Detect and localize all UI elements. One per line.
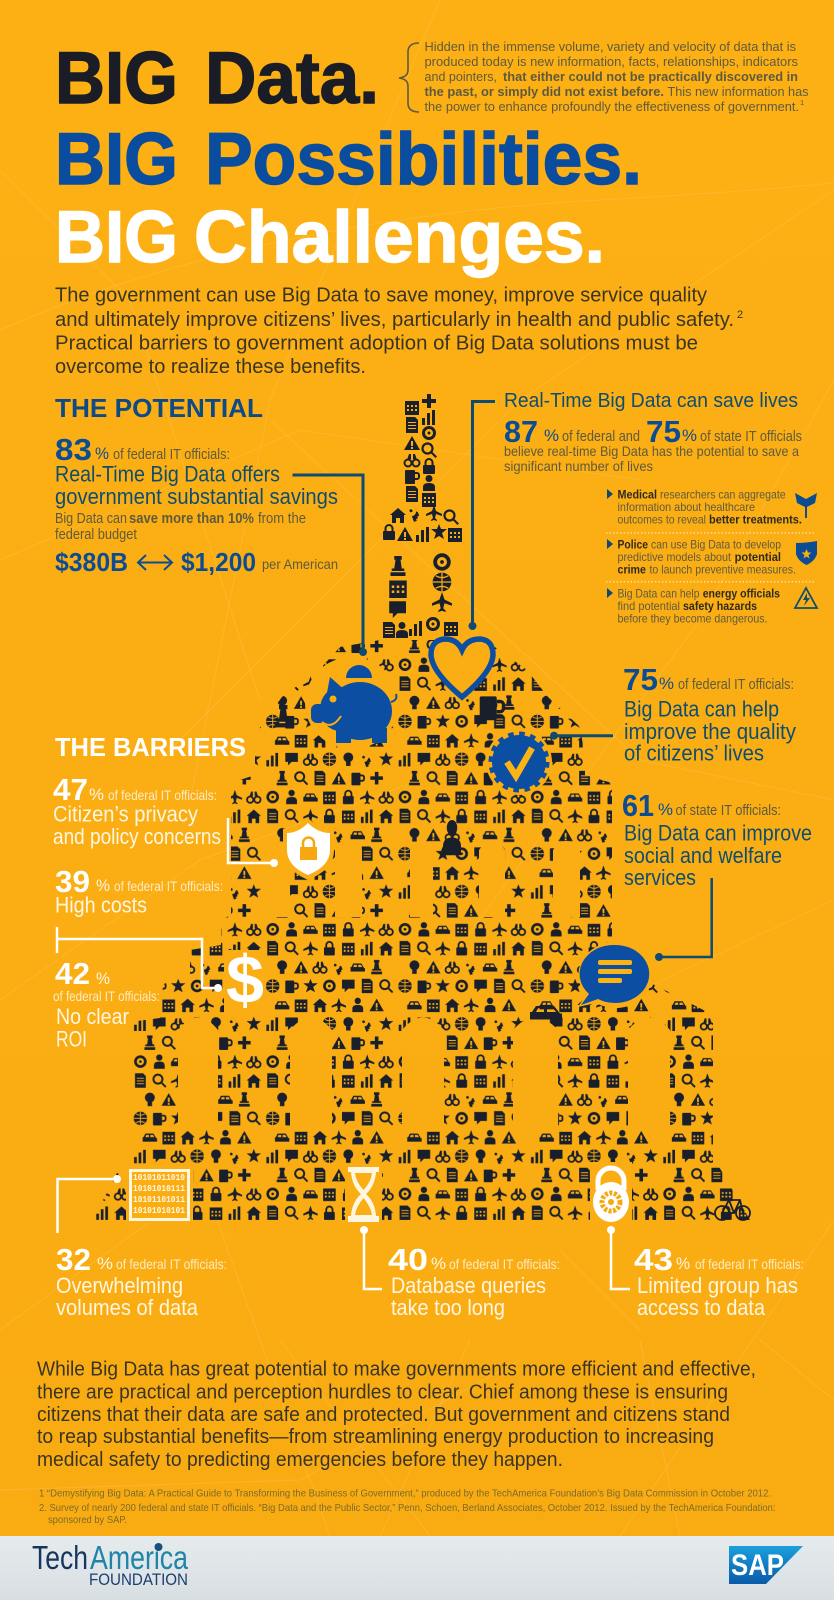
closing paragraph: there are practical and perception hurdles to clear. Chief among these is ensuring xyxy=(37,1381,728,1403)
budget comparison: per American xyxy=(262,556,338,572)
stat: 32 percent volumes: of federal IT officials: xyxy=(116,1256,227,1272)
stat: 40 percent queries: Database queries xyxy=(391,1273,546,1298)
stat: 40 percent queries: of federal IT officials: xyxy=(449,1256,560,1272)
stat: 32 percent volumes: 32 xyxy=(56,1242,91,1277)
connector to padlock xyxy=(607,1226,630,1289)
connector to dollar sign xyxy=(57,927,222,992)
stat: 42 percent roi xyxy=(53,956,160,1052)
stat: 83 percent savings: government substantial savings xyxy=(55,484,338,509)
bullet: police: crime xyxy=(618,562,646,576)
stat: 87 and 75 percent: of federal and xyxy=(562,429,640,445)
bullet: energy: find potential xyxy=(618,599,680,613)
budget comparison: $1,200 xyxy=(181,547,256,577)
stat: 43 percent access xyxy=(634,1242,804,1320)
title xyxy=(55,38,642,278)
bullet: police xyxy=(607,538,796,576)
title: Possibilities. xyxy=(205,119,642,200)
definition text: that either could not be practically discovered in xyxy=(503,70,798,84)
definition text: the past, or simply did not exist before. xyxy=(424,85,664,99)
stat: 47 percent privacy: 47 xyxy=(53,772,88,807)
bullet: police: predictive models about xyxy=(618,550,732,564)
stat: 47 percent privacy: of federal IT officials: xyxy=(108,787,217,803)
intro paragraph: and ultimately improve citizens’ lives, particularly in health and public safety. xyxy=(55,309,734,331)
stat: 43 percent access: Limited group has xyxy=(637,1273,798,1298)
bullet: energy xyxy=(607,586,780,626)
intro paragraph: The government can use Big Data to save money, improve service quality xyxy=(55,284,707,306)
icon: padlock xyxy=(590,1162,632,1224)
stat: 47 percent privacy: % xyxy=(89,785,104,804)
icon: speech bubble xyxy=(578,942,653,1008)
stat: 87 and 75 percent: believe real-time Big Data has the potential to save a xyxy=(504,443,799,459)
connector to hourglass xyxy=(360,1226,382,1289)
stat: 42 percent roi: % xyxy=(96,969,110,988)
budget comparison: $380B xyxy=(55,547,128,577)
closing paragraph: While Big Data has great potential to make governments more efficient and effective, xyxy=(37,1359,756,1381)
stat: 87 and 75 percent: of state IT officials xyxy=(700,429,802,445)
icon: binary data box: 10101010101 xyxy=(133,1206,186,1216)
title: Data. xyxy=(205,38,379,119)
stat: 87 and 75 percent: 87 xyxy=(504,414,538,449)
stat: 87 and 75 percent: 75 xyxy=(646,414,681,449)
bullet: energy: safety hazards xyxy=(683,599,757,613)
stat: 39 percent costs: % xyxy=(96,876,110,895)
stat: 32 percent volumes: volumes of data xyxy=(56,1295,199,1320)
stat: 42 percent roi: 42 xyxy=(55,956,90,991)
bullet: police: potential xyxy=(735,550,781,564)
panel: quality of life: improve the quality xyxy=(624,719,796,744)
connector to shield xyxy=(228,818,278,867)
panel: quality of life: 75 xyxy=(623,662,658,697)
definition text xyxy=(424,40,808,114)
stat: 40 percent queries: take too long xyxy=(391,1295,505,1320)
stat: 40 percent queries: % xyxy=(431,1254,446,1273)
definition text: Hidden in the immense volume, variety and velocity of data that is xyxy=(424,40,796,54)
heading: the barriers: THE BARRIERS xyxy=(55,732,246,762)
closing paragraph xyxy=(37,1359,756,1471)
title: BIG xyxy=(55,197,178,278)
budget comparison xyxy=(55,547,338,577)
closing paragraph: medical safety to predicting emergencies before they happen. xyxy=(37,1449,563,1471)
logo: TechAmerica Foundation: FOUNDATION xyxy=(89,1570,188,1589)
icon: binary data box: 10101010111 xyxy=(133,1184,186,1194)
icon: police badge xyxy=(796,541,817,565)
definition text: and pointers, xyxy=(424,70,497,84)
stat: 83 percent savings: federal budget xyxy=(55,527,137,543)
panel: quality of life: of citizens’ lives xyxy=(624,741,764,766)
icon: shield with lock xyxy=(283,818,334,880)
definition bracket xyxy=(399,43,419,112)
intro paragraph: overcome to realize these benefits. xyxy=(55,356,366,378)
stat: 83 percent savings xyxy=(55,432,338,543)
icon: check badge xyxy=(486,729,552,795)
intro paragraph xyxy=(55,284,743,378)
footnotes xyxy=(39,1488,776,1526)
stat: 39 percent costs xyxy=(55,864,223,918)
stat: 87 and 75 percent: significant number of lives xyxy=(504,458,653,474)
connector to binary box xyxy=(58,1175,121,1233)
stat: 47 percent privacy: and policy concerns xyxy=(53,824,221,849)
stat: 42 percent roi: of federal IT officials: xyxy=(53,988,160,1004)
stat: 32 percent volumes xyxy=(56,1242,227,1320)
stat: 83 percent savings: of federal IT officials: xyxy=(113,447,230,463)
icon: heart xyxy=(431,639,493,697)
stat: 87 and 75 percent: % xyxy=(544,426,559,445)
heading: save lives: Real-Time Big Data can save lives xyxy=(504,389,798,412)
definition text: 1 xyxy=(800,98,804,107)
panel: social and welfare: Big Data can improve xyxy=(624,821,812,846)
stat: 43 percent access: of federal IT officials: xyxy=(695,1256,804,1272)
stat: 47 percent privacy xyxy=(53,772,221,849)
footnotes: sponsored by SAP. xyxy=(48,1514,127,1526)
panel: quality of life: of federal IT officials: xyxy=(678,677,794,693)
panel: social and welfare: % xyxy=(658,800,673,819)
stat: 83 percent savings: 83 xyxy=(55,432,92,467)
panel: quality of life xyxy=(550,662,796,766)
panel: save lives xyxy=(468,389,817,630)
bullet: energy: energy officials xyxy=(703,586,780,600)
stat: 32 percent volumes: % xyxy=(97,1254,113,1273)
stat: 87 and 75 percent: % xyxy=(682,426,697,445)
closing paragraph: to reap substantial benefits—from streamlining energy production to increasing xyxy=(37,1426,714,1448)
icon: dollar sign: $ xyxy=(226,942,264,1018)
panel: quality of life: % xyxy=(659,674,674,693)
title: BIG xyxy=(55,119,178,200)
panel: the potential xyxy=(55,393,367,656)
bullet: energy: before they become dangerous. xyxy=(618,612,768,626)
connector to heart xyxy=(468,402,495,630)
bullet: medical: better treatments. xyxy=(709,512,802,526)
stat: 47 percent privacy: Citizen’s privacy xyxy=(53,802,198,827)
panel: social and welfare xyxy=(622,788,812,961)
logo: TechAmerica Foundation: America xyxy=(90,1539,189,1576)
icon: hourglass xyxy=(345,1164,382,1224)
capitol spire and lantern icons xyxy=(383,394,462,638)
stat: 83 percent savings: % xyxy=(95,444,109,463)
panel: social and welfare: 61 xyxy=(622,788,654,823)
title: Challenges. xyxy=(194,197,605,278)
footnotes: 1 “Demystifying Big Data: A Practical Guide to Transforming the Business of Government,” produced by the TechAmerica Foundation’s Big Data Commission in October 2012. xyxy=(39,1488,771,1500)
stat: 42 percent roi: ROI xyxy=(56,1027,87,1052)
logo: SAP: SAP xyxy=(731,1549,784,1582)
capitol building made of icons xyxy=(93,640,750,1220)
stat: 32 percent volumes: Overwhelming xyxy=(56,1273,183,1298)
panel: the barriers xyxy=(53,732,804,1320)
heading: the potential: THE POTENTIAL xyxy=(55,393,263,423)
logo: TechAmerica Foundation: Tech xyxy=(32,1539,88,1576)
title: BIG xyxy=(55,38,178,119)
closing paragraph: citizens that their data are safe and protected. But government and citizens stand xyxy=(37,1404,730,1426)
bullet: police: Police xyxy=(618,538,648,552)
connector to check badge xyxy=(550,732,613,740)
connector to piggy bank xyxy=(292,475,367,656)
panel: social and welfare: social and welfare xyxy=(624,843,782,868)
bullet: medical xyxy=(607,488,802,526)
stat: 39 percent costs: of federal IT officials: xyxy=(114,878,223,894)
stat: 83 percent savings: Real-Time Big Data offers xyxy=(55,462,280,487)
stat: 43 percent access: access to data xyxy=(637,1295,766,1320)
icon: binary data box: 10101101011 xyxy=(133,1195,186,1205)
intro paragraph: 2 xyxy=(737,309,743,321)
stat: 39 percent costs: 39 xyxy=(55,864,90,899)
stat: 39 percent costs: High costs xyxy=(55,893,147,918)
stat: 40 percent queries: 40 xyxy=(388,1242,428,1277)
stat: 87 and 75 percent xyxy=(504,414,802,474)
bullet: medical: outcomes to reveal xyxy=(618,512,706,526)
panel: social and welfare: of state IT officials: xyxy=(676,803,781,819)
logo: TechAmerica Foundation xyxy=(32,1539,189,1589)
definition text: This new information has xyxy=(668,85,808,99)
stat: 83 percent savings: Big Data can xyxy=(55,511,127,527)
stat: 83 percent savings: save more than 10% xyxy=(129,511,254,527)
intro paragraph: Practical barriers to government adoption of Big Data solutions must be xyxy=(55,332,698,354)
icon: binary data box: 10101011010 xyxy=(133,1173,185,1183)
definition text: the power to enhance profoundly the effectiveness of government. xyxy=(424,100,799,114)
bullet: police: can use Big Data to develop xyxy=(651,538,781,552)
icon: hazard triangle xyxy=(795,588,817,608)
bullet: police: to launch preventive measures. xyxy=(650,562,796,576)
definition text: produced today is new information, facts, relationships, indicators xyxy=(424,55,798,69)
extra dark icons on the capitol xyxy=(275,696,562,1020)
panel: social and welfare: services xyxy=(624,865,696,890)
icon: piggy bank xyxy=(305,657,399,749)
bullet: medical: researchers can aggregate xyxy=(660,488,786,502)
stat: 43 percent access: 43 xyxy=(634,1242,673,1277)
panel: quality of life: Big Data can help xyxy=(624,697,779,722)
bullet: medical: Medical xyxy=(618,488,657,502)
footer band xyxy=(0,1536,834,1600)
icon: caduceus xyxy=(795,493,817,518)
icon: binary data box xyxy=(126,1166,193,1223)
connector to speech bubble xyxy=(655,878,712,961)
stat: 42 percent roi: No clear xyxy=(56,1004,129,1029)
bullet: medical: information about healthcare xyxy=(618,500,755,514)
icon: bicycle xyxy=(715,1200,750,1220)
bullet: energy: Big Data can help xyxy=(618,586,700,600)
stat: 43 percent access: % xyxy=(676,1254,690,1273)
stat: 40 percent queries xyxy=(388,1242,560,1320)
stat: 83 percent savings: from the xyxy=(258,511,306,527)
